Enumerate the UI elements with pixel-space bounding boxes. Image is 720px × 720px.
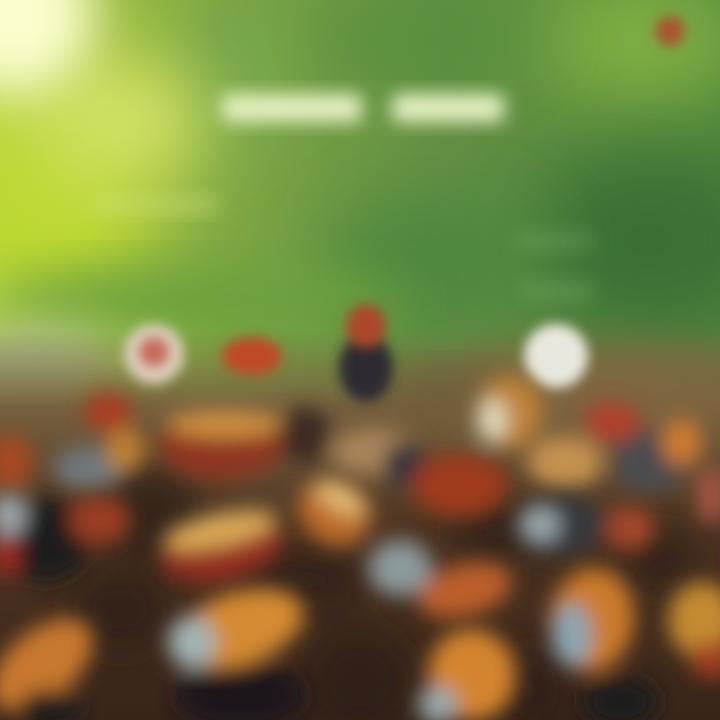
icon: standing ladybug <box>339 304 393 402</box>
icon: red badge top right <box>655 16 685 46</box>
middle row ladybugs <box>0 465 654 628</box>
ground: brown soil <box>0 330 720 720</box>
icon: red oval <box>222 337 282 375</box>
ladybug cluster <box>0 376 720 720</box>
subtitle: faint text left <box>90 196 220 214</box>
back row ladybugs <box>0 376 720 525</box>
title: blurred white heading <box>222 94 504 122</box>
dark shadows between ladybugs <box>70 460 700 720</box>
icon: pink circle <box>124 324 184 384</box>
text block: faint text right <box>515 235 595 297</box>
front row ladybugs <box>0 563 720 720</box>
icon: white circle <box>524 324 588 388</box>
